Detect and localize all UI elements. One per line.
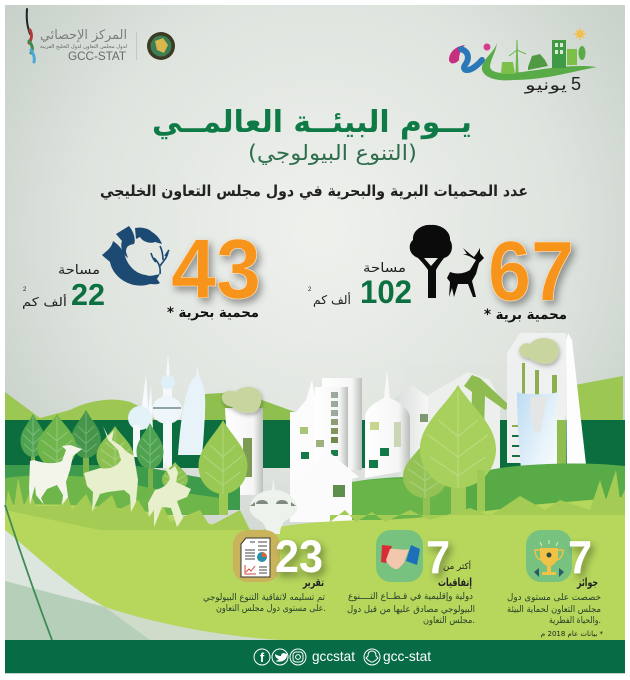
cloud right <box>519 338 559 364</box>
deer 2 <box>84 426 138 512</box>
number: 23 <box>275 531 323 582</box>
logo arabic subtitle: لدول مجلس التعاون لدول الخليج العربية <box>40 44 127 50</box>
icon: blue ribbon <box>461 49 482 70</box>
heading: جوائز <box>576 576 598 589</box>
icon: instagram <box>290 649 306 665</box>
icon: sun <box>574 28 586 40</box>
tree 9 <box>420 385 496 488</box>
logo arabic name: المركز الإحصائي <box>40 28 127 43</box>
green tower arm <box>464 375 510 470</box>
tree 7 trunk <box>219 480 228 515</box>
icon: deer <box>447 248 484 297</box>
description: مجلس التعاون لحماية البيئة <box>507 605 601 615</box>
icon: handshake <box>376 530 423 582</box>
label: * محمية برية <box>484 307 567 323</box>
pale curve strip <box>105 607 280 640</box>
superscript: 2 <box>308 287 312 293</box>
tree 1 <box>20 414 46 457</box>
description: والحياة الفطرية. <box>549 616 601 626</box>
white building centre <box>225 408 263 495</box>
mid ground light strip left <box>5 475 220 515</box>
number: 7 <box>426 531 450 583</box>
tree 5 <box>136 423 164 469</box>
pale bottom-left wedges <box>5 530 150 640</box>
area value: 22 <box>71 277 105 312</box>
logo latin name: GCC-STAT <box>68 49 127 63</box>
description <box>507 593 601 626</box>
foreground grass field <box>5 497 625 640</box>
number 67: 67 <box>488 224 574 318</box>
icon: facebook: f <box>260 650 265 665</box>
stat card: agreements <box>347 530 475 626</box>
white house <box>290 451 359 522</box>
dark green band <box>5 420 625 468</box>
description: البيولوجي مصادق عليها من قبل دول <box>347 605 475 615</box>
icon: document <box>233 530 280 582</box>
heading: تقرير <box>302 576 324 589</box>
mid ground hills <box>5 465 240 510</box>
tree 6 <box>162 462 188 490</box>
tree 8 <box>403 441 447 498</box>
heading: إتفاقيات <box>438 576 472 589</box>
footer bar <box>5 640 625 673</box>
stem line <box>5 505 52 640</box>
darker bottom-left wedge <box>5 581 150 640</box>
mid ground hill right front <box>352 479 455 520</box>
deer 3 <box>148 462 191 527</box>
stat: marine reserves <box>22 222 261 321</box>
logo: June 5 environment day <box>449 28 597 94</box>
stat card: reports <box>203 530 326 614</box>
description: مجلس التعاون. <box>423 616 475 626</box>
house window <box>333 485 345 497</box>
area label: مساحة <box>363 261 406 276</box>
subtitle: (التنوع البيولوجي) <box>248 141 417 165</box>
trunk right <box>477 470 485 520</box>
mid ground hill right <box>352 464 625 515</box>
icon: coloured ribbon <box>27 9 34 62</box>
tree 3 <box>38 414 76 468</box>
tower dome <box>250 477 297 534</box>
area label: مساحة <box>58 263 100 278</box>
deer group <box>29 426 191 527</box>
more than: أكثر من <box>443 560 471 572</box>
Kuwait towers <box>128 353 182 468</box>
grass blades <box>5 470 625 530</box>
trunks <box>31 450 178 510</box>
handle gcc-stat: gcc-stat <box>383 648 431 664</box>
tree 4 <box>96 426 134 474</box>
date label: يونيو <box>524 76 567 94</box>
icon: pink ribbon <box>449 45 465 63</box>
date label: 5 <box>571 74 581 94</box>
icon: trophy <box>526 530 572 582</box>
description <box>203 593 326 614</box>
landscape illustration <box>5 333 625 640</box>
area value: 102 <box>360 274 412 310</box>
stat card: awards <box>507 530 603 638</box>
icon: GCC emblem <box>147 32 175 60</box>
back hills <box>5 376 623 430</box>
area unit: ألف كم <box>313 292 351 307</box>
kingdom tower and tall buildings <box>507 333 590 510</box>
icon: tree <box>410 225 452 298</box>
description: تم تسليمه لاتفاقية التنوع البيولوجي <box>203 593 325 603</box>
description: خصصت على مستوى دول <box>507 593 601 603</box>
glass tower <box>178 363 205 455</box>
icon: facebook <box>254 649 270 665</box>
description: دولية وإقليمية في قـطــاع التــــنوع <box>348 592 473 602</box>
icon: snapchat <box>364 649 380 665</box>
icon: twitter <box>272 649 288 665</box>
white buildings centre right <box>290 370 500 500</box>
logo: GCC-STAT <box>27 9 175 63</box>
superscript: 2 <box>23 287 27 293</box>
title: يــوم البيئــة العالمــي <box>152 105 472 140</box>
footnote: * بيانات عام 2018 م <box>541 630 603 638</box>
description <box>347 592 475 626</box>
description: على مستوى دول مجلس التعاون. <box>216 604 326 614</box>
label: * محمية بحرية <box>167 305 259 321</box>
skyline towers left <box>128 353 205 468</box>
chart heading: عدد المحميات البرية والبحرية في دول مجلس التعاون الخليجي <box>100 182 528 200</box>
deer 1 <box>29 445 82 505</box>
leaf trees <box>20 385 496 522</box>
icon: marine life circle <box>102 226 169 286</box>
icon: figure dot <box>484 44 490 50</box>
building window <box>243 438 252 477</box>
stat: land reserves <box>308 224 574 323</box>
area unit: ألف كم <box>22 294 67 309</box>
tree 8 trunk <box>423 490 430 520</box>
tree 7 <box>198 420 248 494</box>
number: 7 <box>568 531 592 583</box>
date label <box>524 74 581 94</box>
number 43: 43 <box>171 222 261 316</box>
icon: green arc with skyline <box>482 40 597 80</box>
handle gccstat: gccstat <box>312 648 355 664</box>
tree 9 trunk <box>451 480 466 522</box>
tree 2 <box>71 410 101 458</box>
cloud left <box>222 387 261 413</box>
